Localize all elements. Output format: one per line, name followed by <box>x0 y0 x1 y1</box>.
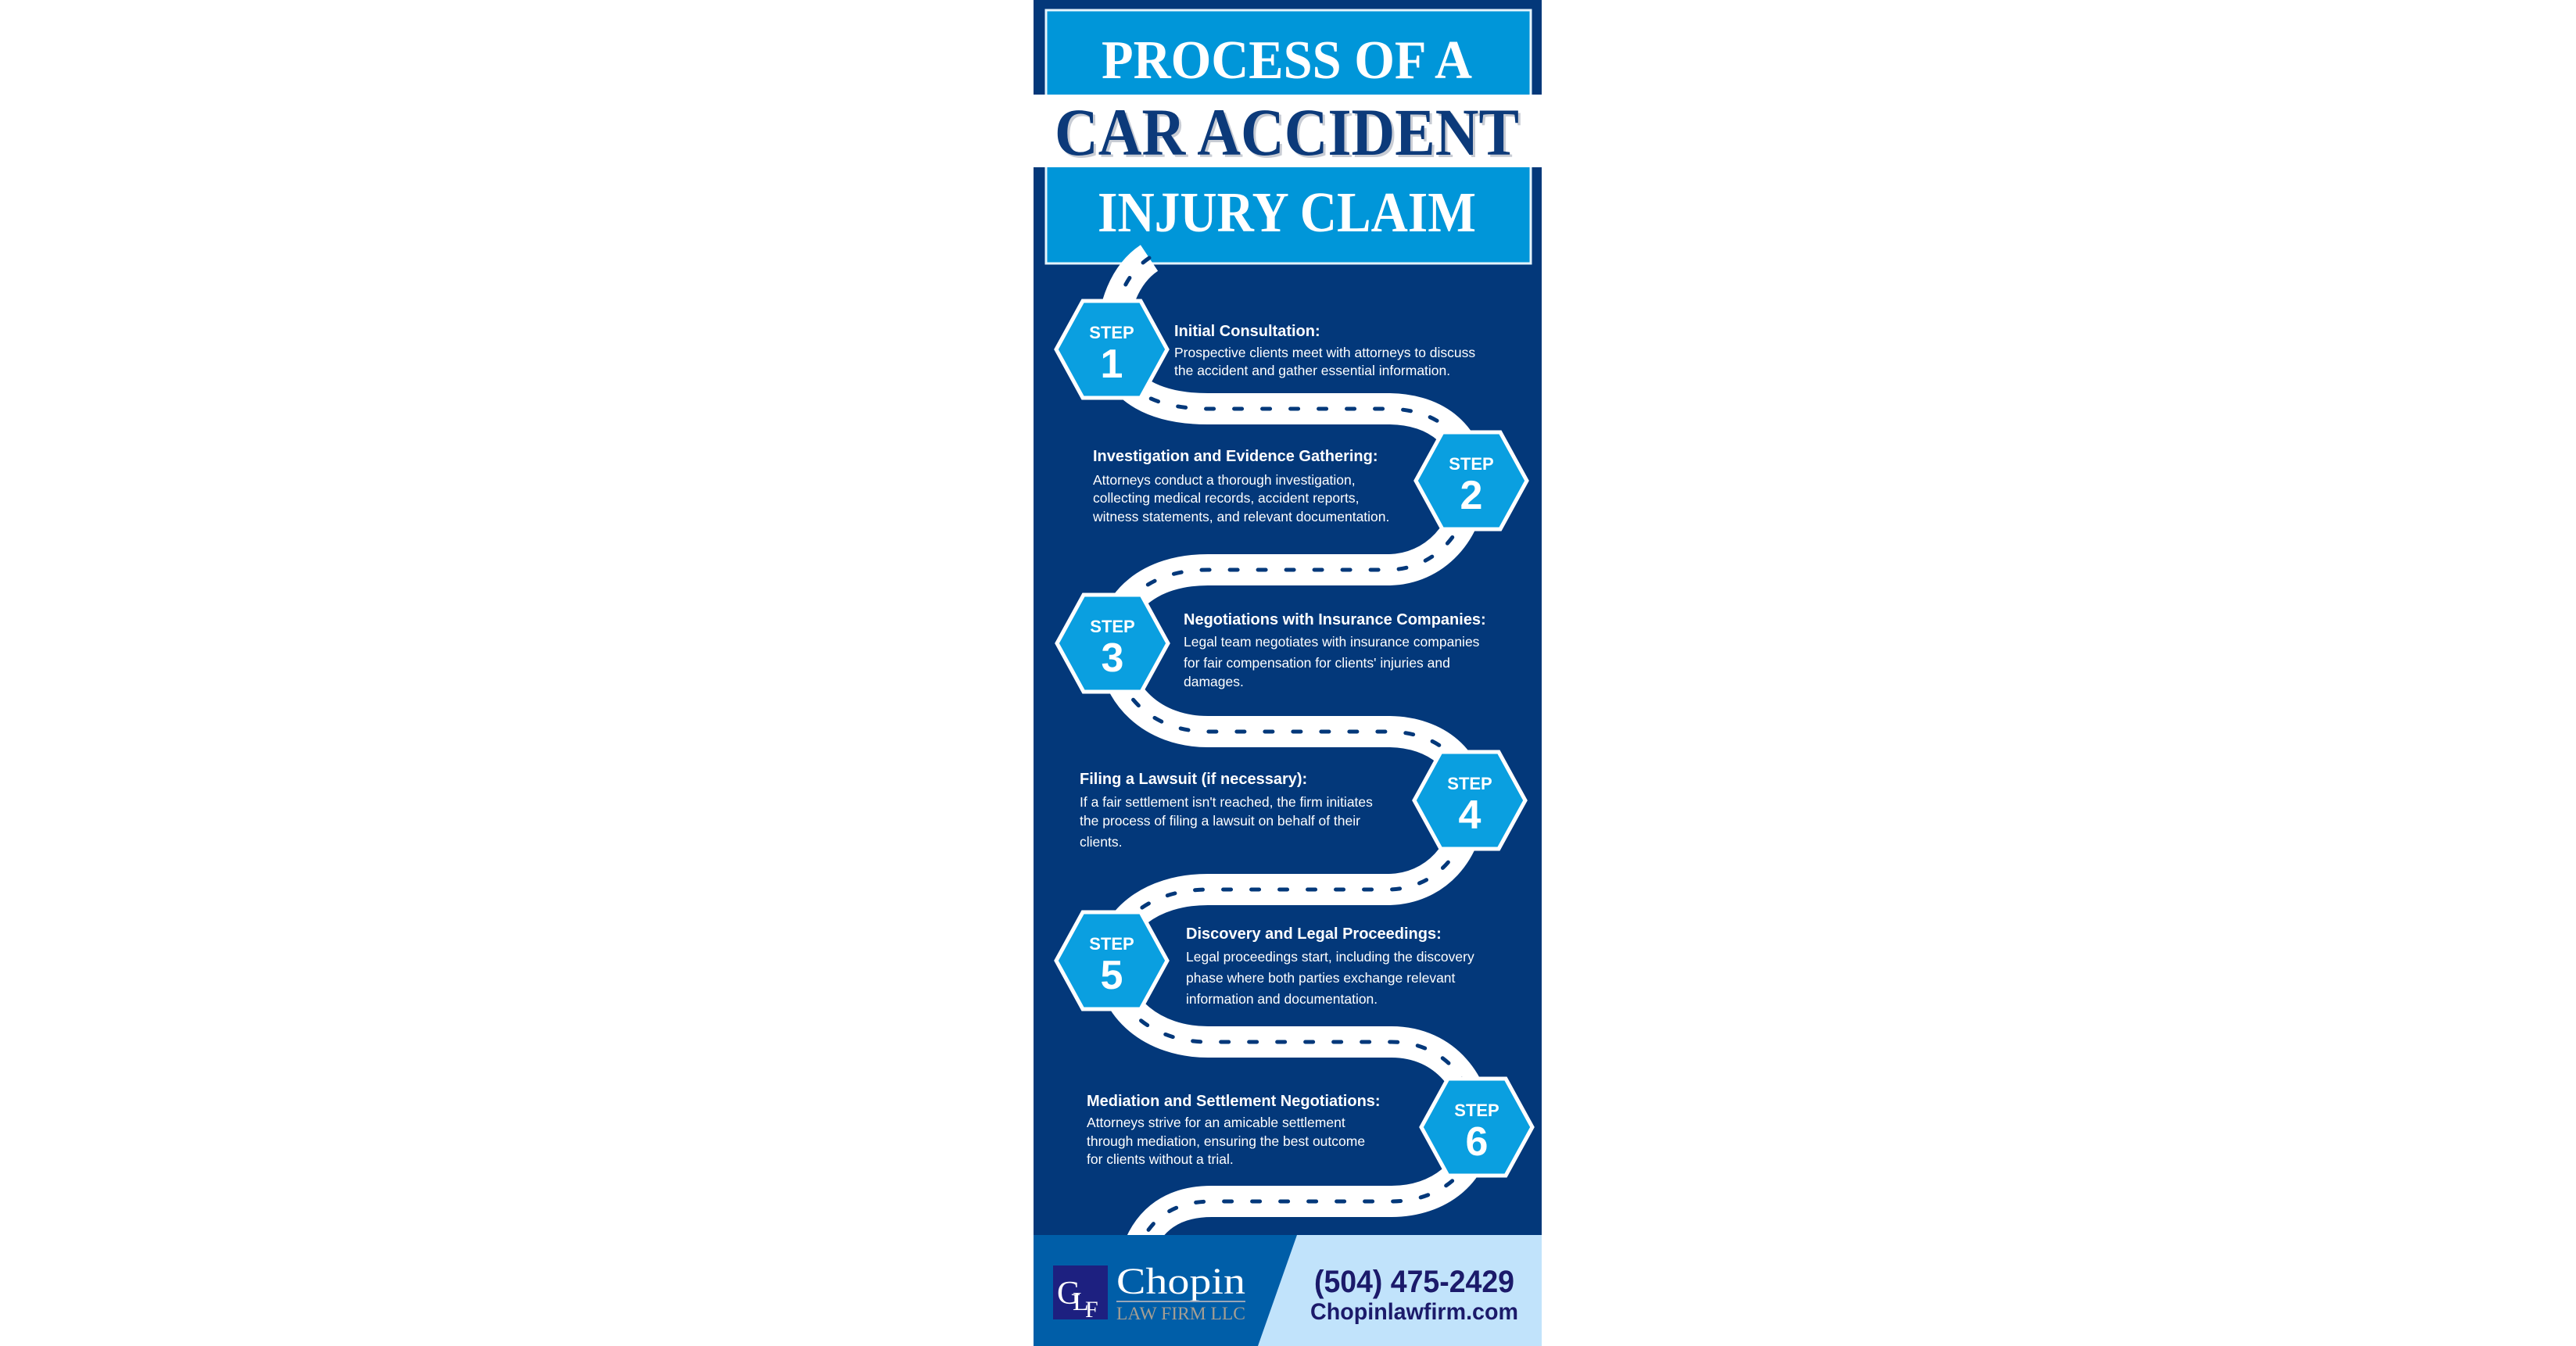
text: step 1 <box>1174 323 1475 378</box>
logo: Chopin Law Firm: L <box>1073 1287 1089 1316</box>
text: step 2: witness statements, and relevant documentation. <box>1092 509 1389 524</box>
text: step 5 <box>1186 925 1474 1007</box>
logo: Chopin Law Firm: Chopin <box>1116 1261 1245 1302</box>
logo: Chopin Law Firm: F <box>1085 1297 1098 1323</box>
icon: step 2 hexagon <box>1416 432 1527 529</box>
icon: step 1 hexagon: STEP <box>1089 323 1134 342</box>
text: step 6: Attorneys strive for an amicable settlement <box>1087 1115 1345 1130</box>
text: step 4: Filing a Lawsuit (if necessary): <box>1080 771 1307 788</box>
text: step 6: Mediation and Settlement Negotiations: <box>1087 1093 1381 1110</box>
text: step 5: Discovery and Legal Proceedings: <box>1186 925 1442 943</box>
text: step 5: Legal proceedings start, including the discovery <box>1186 949 1474 965</box>
text: step 3: Negotiations with Insurance Companies: <box>1184 611 1486 628</box>
text: step 2: collecting medical records, accident reports, <box>1093 490 1359 506</box>
text: step 4: the process of filing a lawsuit on behalf of their <box>1080 813 1360 829</box>
icon: step 3 hexagon <box>1057 595 1168 692</box>
logo: Chopin Law Firm <box>1053 1261 1245 1323</box>
logo: Chopin Law Firm: G <box>1057 1276 1080 1312</box>
contact: phone and website <box>1310 1265 1518 1325</box>
text: step 5: information and documentation. <box>1186 991 1378 1007</box>
title block: CAR ACCIDENT <box>1055 95 1519 170</box>
text: step 4: clients. <box>1080 834 1122 850</box>
icon: step 4 hexagon: 4 <box>1459 793 1481 838</box>
icon: step 6 hexagon: STEP <box>1454 1101 1499 1120</box>
text: step 3: Legal team negotiates with insurance companies <box>1184 634 1480 650</box>
text: step 1: the accident and gather essential information. <box>1174 363 1450 378</box>
text: step 4: If a fair settlement isn't reached, the firm initiates <box>1080 794 1373 810</box>
text: step 2 <box>1092 448 1389 524</box>
text: step 4 <box>1080 771 1373 850</box>
title block: PROCESS OF A <box>1102 30 1472 91</box>
text: step 6: through mediation, ensuring the best outcome <box>1087 1133 1365 1149</box>
text: step 3: damages. <box>1184 674 1244 689</box>
title block: INJURY CLAIM <box>1098 181 1476 244</box>
icon: step 2 hexagon: STEP <box>1449 454 1494 474</box>
text: step 1: Prospective clients meet with attorneys to discuss <box>1174 345 1475 360</box>
text: step 3: for fair compensation for clients' injuries and <box>1184 655 1450 671</box>
text: step 2: Investigation and Evidence Gathering: <box>1093 448 1378 465</box>
text: step 6 <box>1087 1093 1381 1167</box>
text: step 1: Initial Consultation: <box>1174 323 1320 340</box>
icon: step 6 hexagon: 6 <box>1466 1119 1488 1165</box>
icon: step 4 hexagon: STEP <box>1447 774 1492 793</box>
panel: background <box>1034 0 1542 1346</box>
icon: step 3 hexagon: STEP <box>1090 617 1135 636</box>
icon: step 5 hexagon: 5 <box>1101 953 1123 998</box>
icon: step 2 hexagon: 2 <box>1460 473 1482 518</box>
icon: step 1 hexagon <box>1056 301 1167 398</box>
text: step 6: for clients without a trial. <box>1087 1151 1234 1167</box>
logo: Chopin Law Firm: LAW FIRM LLC <box>1116 1304 1245 1323</box>
title block: CAR ACCIDENT <box>1057 97 1521 172</box>
icon: step 4 hexagon <box>1414 752 1525 849</box>
text: step 3 <box>1184 611 1486 689</box>
footer <box>1034 1235 1542 1346</box>
title block <box>1034 10 1542 263</box>
icon: step 6 hexagon <box>1421 1079 1532 1176</box>
text: step 5: phase where both parties exchange relevant <box>1186 970 1456 986</box>
icon: step 3 hexagon: 3 <box>1102 635 1123 681</box>
road <box>1112 258 1477 1251</box>
icon: step 5 hexagon: STEP <box>1089 934 1134 954</box>
text: step 2: Attorneys conduct a thorough investigation, <box>1093 472 1356 488</box>
contact: phone and website: (504) 475-2429 <box>1314 1265 1514 1299</box>
icon: step 5 hexagon <box>1056 912 1167 1009</box>
contact: phone and website: Chopinlawfirm.com <box>1310 1299 1518 1325</box>
icon: step 1 hexagon: 1 <box>1101 342 1123 387</box>
